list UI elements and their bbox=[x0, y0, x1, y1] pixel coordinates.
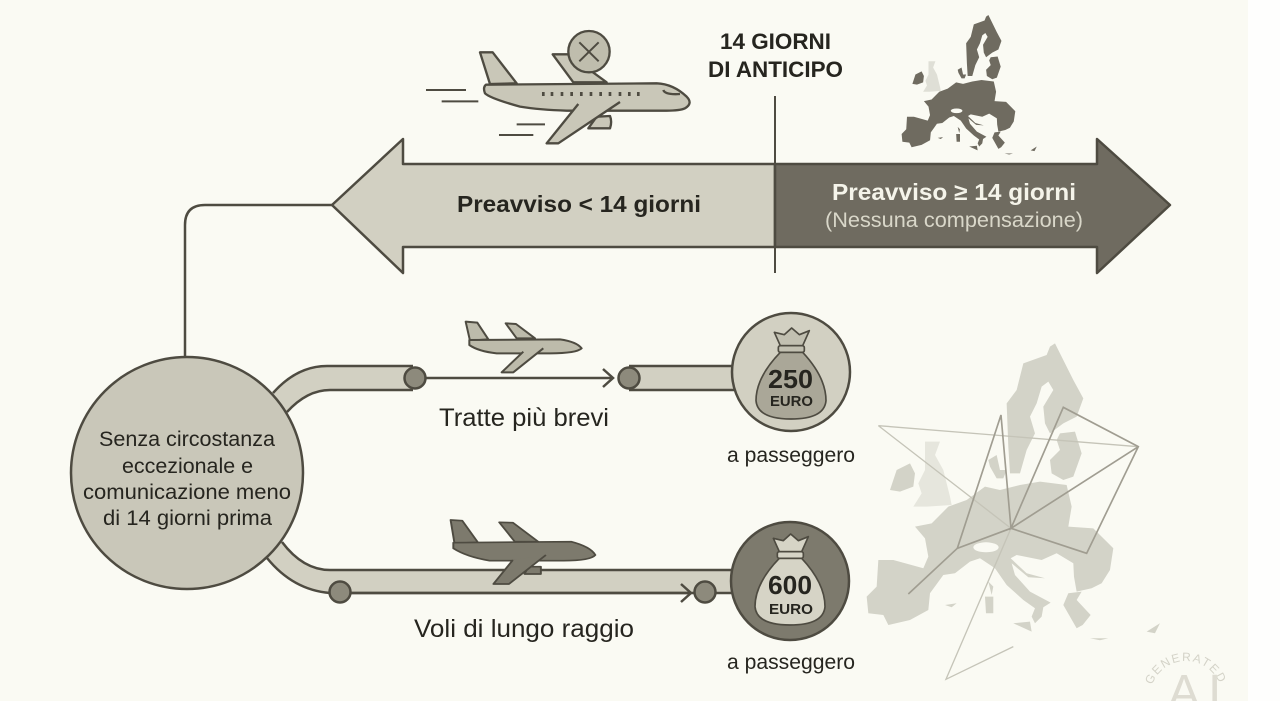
arrow: preavviso di almeno 14 giorni bbox=[775, 139, 1170, 273]
tube start cap bbox=[618, 368, 640, 388]
marker line: 14 giorni bbox=[774, 96, 776, 273]
map: Europe faded with route lines bbox=[867, 343, 1160, 679]
tube end cap bbox=[404, 368, 426, 388]
node: long route start bbox=[330, 582, 350, 602]
circle: senza circostanza eccezionale bbox=[71, 357, 303, 589]
label: preavviso inferiore: Preavviso < 14 giorni bbox=[457, 191, 701, 217]
coin: 600 euro bbox=[731, 522, 849, 640]
icon: cancel badge bbox=[568, 31, 610, 72]
arrow: long route bbox=[350, 584, 691, 602]
label: nessuna compensazione: (Nessuna compensazione) bbox=[825, 209, 1083, 232]
heading: 14 giorni di anticipo: 14 GIORNI bbox=[720, 29, 831, 54]
heading: 14 giorni di anticipo: DI ANTICIPO bbox=[708, 57, 843, 82]
icon: long-haul plane bbox=[451, 520, 595, 584]
badge: generated AI: GENERATED bbox=[1146, 652, 1225, 684]
heading: 14 giorni di anticipo bbox=[708, 29, 843, 82]
label: a passeggero (250): a passeggero bbox=[727, 444, 855, 467]
icon: short-haul plane bbox=[466, 322, 582, 372]
badge: generated AI bbox=[1146, 652, 1229, 701]
coin: 250 euro bbox=[732, 313, 850, 431]
label: preavviso superiore: Preavviso ≥ 14 giorni bbox=[832, 179, 1076, 205]
icon: cancelled plane bbox=[426, 31, 690, 143]
coin: 250 euro: 250 bbox=[768, 364, 813, 394]
tube: short route to coin bbox=[618, 366, 735, 390]
arrow: preavviso inferiore a 14 giorni bbox=[332, 139, 775, 273]
node: long route end bbox=[694, 582, 716, 602]
label: tratte più brevi: Tratte più brevi bbox=[439, 404, 609, 432]
coin: 600 euro: 600 bbox=[768, 570, 812, 600]
label: a passeggero (600): a passeggero bbox=[727, 651, 855, 674]
circle: senza circostanza eccezionale: comunicazione meno bbox=[83, 481, 291, 504]
map: Europe small dark bbox=[902, 15, 1037, 154]
coin: 250 euro: EURO bbox=[770, 393, 813, 410]
icon: money bag bbox=[755, 534, 825, 625]
circle: senza circostanza eccezionale: di 14 giorni prima bbox=[103, 507, 272, 530]
tube: lower route from circle bbox=[267, 542, 735, 593]
coin: 600 euro: EURO bbox=[769, 601, 813, 618]
circle: senza circostanza eccezionale: eccezionale e bbox=[122, 455, 253, 478]
label: voli di lungo raggio: Voli di lungo raggio bbox=[414, 615, 634, 643]
icon: money bag bbox=[756, 328, 826, 419]
connector: big arrow to circle bbox=[185, 205, 333, 360]
arrow: short route bbox=[426, 369, 613, 387]
circle: senza circostanza eccezionale: Senza circostanza bbox=[99, 428, 275, 451]
tube: upper route from circle bbox=[273, 366, 426, 412]
